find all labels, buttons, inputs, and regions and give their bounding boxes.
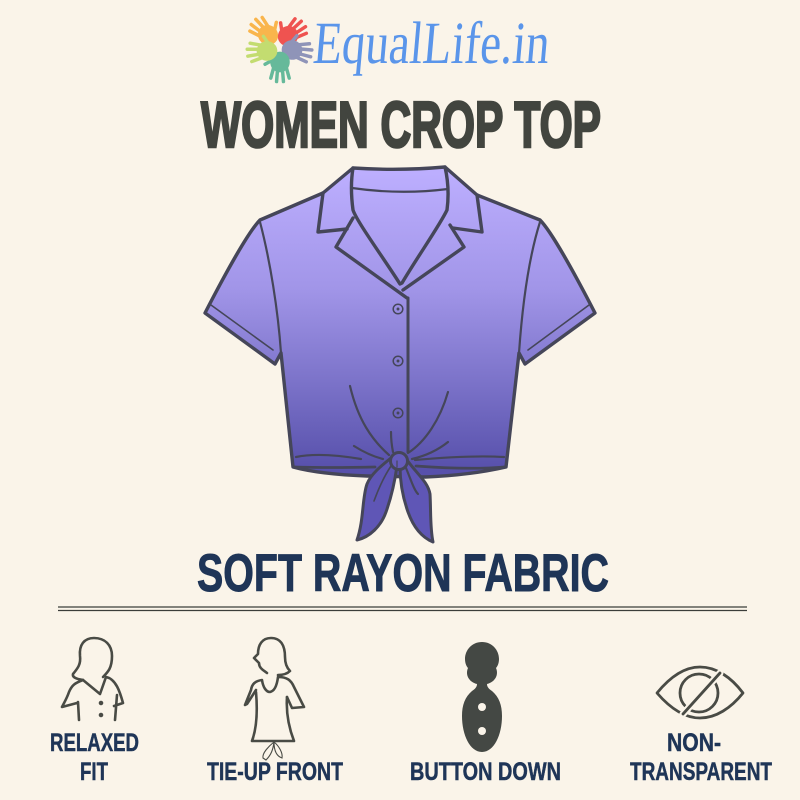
knot tails xyxy=(357,458,433,542)
buttons xyxy=(393,304,403,418)
illustration: purple tie-front crop shirt xyxy=(205,167,595,542)
placket xyxy=(406,298,410,452)
feature: button down xyxy=(410,642,561,786)
logo: EqualLife.in xyxy=(246,10,553,82)
label: NON- xyxy=(667,729,721,757)
shirt body and sleeves xyxy=(205,167,595,477)
title: WOMEN CROP TOP xyxy=(201,88,601,161)
icon: relaxed shirt xyxy=(62,638,123,720)
label: BUTTON DOWN xyxy=(410,758,561,786)
right lapel xyxy=(453,195,482,232)
feature: relaxed fit xyxy=(50,638,139,786)
sleeve seams and cuffs xyxy=(260,222,540,353)
icon: crossed eye xyxy=(657,667,743,718)
icon: five coloured hands xyxy=(246,11,314,82)
icon: woman with tied top xyxy=(245,638,304,741)
left lapel xyxy=(318,193,347,232)
logo wordmark: EqualLife.in xyxy=(311,10,553,77)
icon: button silhouette xyxy=(462,642,502,752)
subtitle: SOFT RAYON FABRIC xyxy=(197,544,609,603)
label: RELAXED xyxy=(50,729,139,757)
knot xyxy=(390,452,408,470)
neck opening and back band xyxy=(352,167,448,284)
feature: non-transparent xyxy=(630,667,772,786)
feature: tie-up front xyxy=(207,638,343,786)
feature: relaxed fit: FIT xyxy=(80,758,108,786)
label: TIE-UP FRONT xyxy=(207,758,343,786)
gathers around the knot xyxy=(296,386,504,460)
